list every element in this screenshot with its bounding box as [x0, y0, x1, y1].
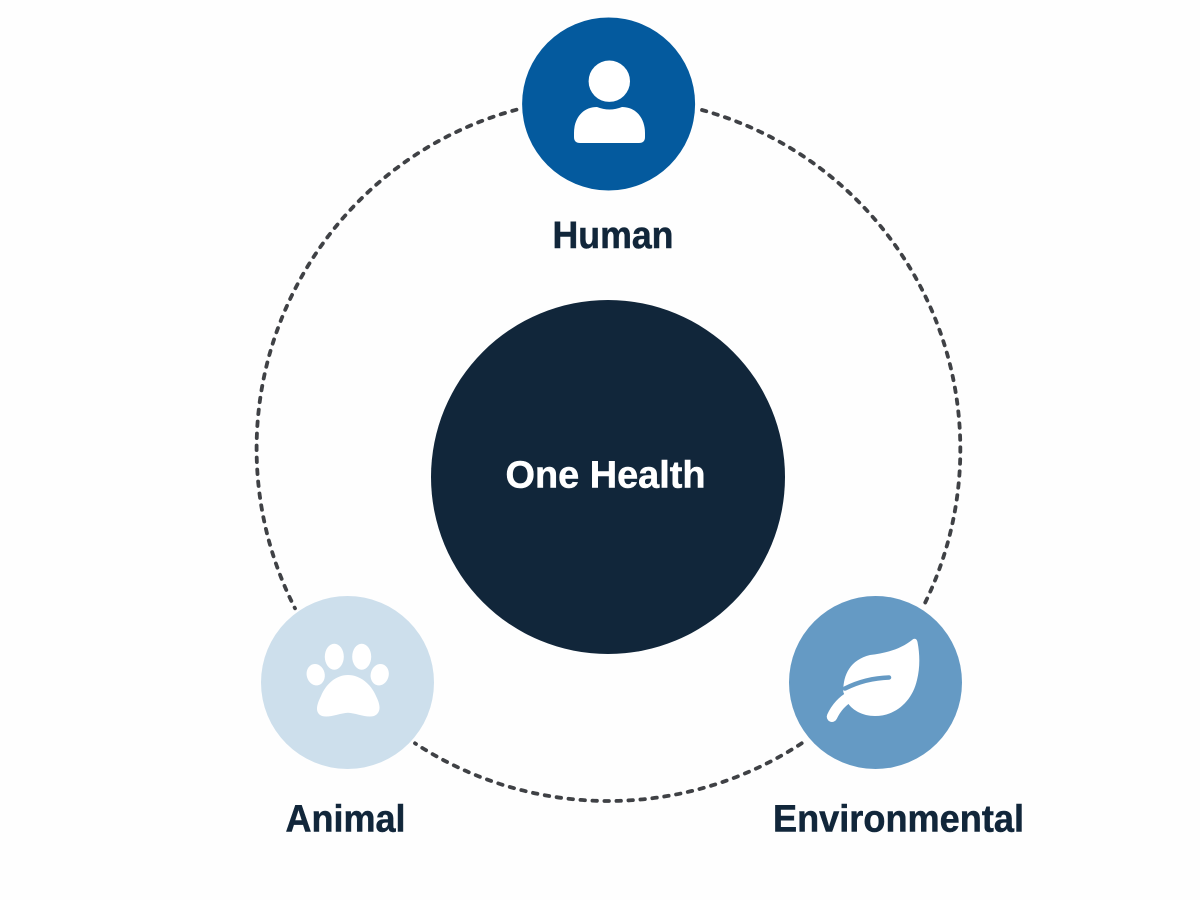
label: Environmental: Environmental	[773, 798, 1024, 840]
label: Human: Human	[552, 215, 674, 257]
center circle: One Health	[431, 300, 785, 654]
node: Animal	[261, 596, 434, 840]
node: Environmental	[773, 596, 1024, 840]
icon: leaf	[832, 639, 919, 717]
center circle: One Health: One Health	[506, 454, 706, 496]
node: Human	[522, 18, 695, 257]
icon: paw	[304, 644, 391, 716]
dashed connecting ring	[257, 110, 960, 801]
label: Animal: Animal	[286, 798, 406, 840]
icon: person	[574, 60, 645, 143]
